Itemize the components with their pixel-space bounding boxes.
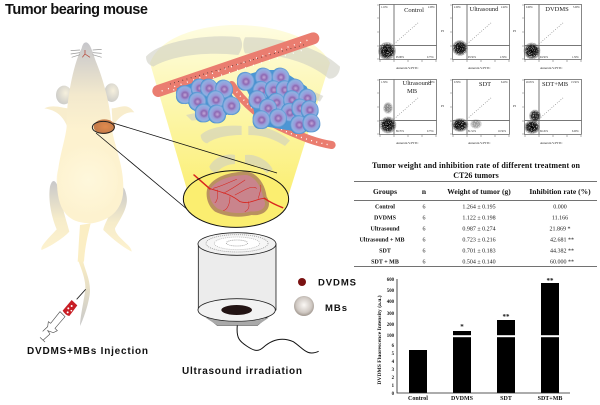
plot: SDT+MB: 60.45%	[540, 130, 549, 133]
enlarged tumor	[183, 171, 289, 227]
plot: Control: 2.08%	[428, 6, 436, 9]
body	[57, 42, 123, 223]
plot: SDT+MB: 13.50%	[571, 81, 580, 84]
table rows: 6	[422, 226, 426, 232]
x axis labels	[408, 396, 562, 402]
table rows: Ultrasound	[370, 226, 400, 232]
table rows: 0.504 ± 0.140	[462, 260, 496, 266]
table rows: 6	[422, 216, 426, 222]
bars	[409, 283, 559, 393]
plot: SDT+MB	[513, 79, 582, 145]
zoom lines	[96, 123, 277, 220]
y axis title: DVDMS Fluorescence Intensity (a.u.)	[376, 295, 383, 385]
tumor cells	[176, 68, 320, 134]
x axis labels: Control	[408, 396, 428, 402]
y axis labels: 5	[392, 352, 395, 357]
ears	[56, 83, 119, 104]
table rows: Control	[375, 204, 395, 210]
plot: DVDMS: DVDMS	[545, 6, 569, 13]
plot: Ultrasound + MB	[377, 79, 437, 145]
plot: Ultrasound: 93.50%	[468, 56, 477, 59]
plot: Ultrasound + MB: Ultrasound	[403, 80, 432, 87]
table rows: 60.000 **	[550, 260, 574, 266]
mouse tail lower	[78, 260, 90, 326]
table rows: 1.122 ± 0.198	[462, 216, 496, 222]
table header: Groups	[373, 187, 397, 196]
plot: Ultrasound: 2.00%	[454, 6, 462, 9]
plot: Ultrasound + MB: 0.75%	[427, 130, 435, 133]
legend: MBs	[294, 296, 347, 316]
table rows: 6	[422, 238, 426, 244]
x axis labels: DVDMS	[451, 396, 474, 402]
plot: Control: Annexin V-FITC	[396, 66, 419, 70]
plot: SDT: PI	[441, 104, 444, 108]
table header: n	[422, 187, 427, 196]
y axis labels: 4	[392, 360, 395, 365]
legend: DVDMS: DVDMS	[318, 278, 356, 288]
table	[354, 182, 597, 266]
legend: MBs: MBs	[325, 303, 347, 314]
table header	[373, 187, 591, 196]
plot: SDT+MB: 20.05%	[526, 81, 535, 84]
mouse	[41, 42, 134, 262]
whiskers and nose	[71, 49, 102, 57]
table rows: 21.869 *	[550, 226, 570, 232]
significance marks: **	[502, 313, 510, 321]
plot: SDT+MB: 6.00%	[572, 130, 580, 133]
y axis labels: 600	[387, 278, 395, 283]
flow cytometry plots	[377, 4, 582, 145]
y axis labels: 2	[392, 376, 395, 381]
table header: Weight of tumor (g)	[447, 187, 511, 196]
plot: DVDMS: 3.00%	[573, 6, 581, 9]
y axis labels: 1	[392, 384, 395, 389]
plot: DVDMS: 0.90%	[526, 6, 534, 9]
syringe	[40, 289, 86, 342]
table rows: 44.382 **	[550, 248, 574, 254]
plot: DVDMS	[513, 4, 582, 70]
plot: Control	[377, 4, 437, 70]
table title: Tumor weight and inhibition rate of different treatment on	[372, 161, 581, 170]
plot: SDT: 81.52%	[468, 130, 477, 133]
legend: DVDMS	[298, 278, 356, 288]
significance marks: *	[460, 323, 464, 331]
plot: Control: Control	[404, 7, 424, 14]
x axis labels: SDT	[500, 396, 512, 402]
plot: Ultrasound + MB: 89.70%	[396, 130, 405, 133]
table rows: 0.723 ± 0.216	[462, 238, 496, 244]
plot: Ultrasound: 2.30%	[500, 56, 508, 59]
plot: Ultrasound: PI	[441, 29, 444, 33]
plot: SDT	[441, 79, 510, 145]
blood vessels	[158, 38, 332, 145]
label: ultrasound irradiation: Ultrasound irradiation	[182, 366, 302, 377]
illustration: ultrasound beam	[146, 25, 340, 200]
plot: Control: 95.88%	[396, 56, 405, 59]
significance marks	[460, 277, 554, 331]
y axis labels: 0	[392, 392, 395, 397]
table rows: 42.681 **	[550, 238, 574, 244]
table rows: 11.166	[552, 216, 568, 222]
plot: SDT: 10.50%	[498, 130, 507, 133]
significance marks: **	[546, 277, 554, 285]
table rows: 1.264 ± 0.195	[462, 204, 496, 210]
plot: SDT+MB: SDT+MB	[542, 81, 569, 88]
y axis labels: 200	[387, 323, 395, 328]
plot: SDT: 0.30%	[454, 81, 462, 84]
plot: DVDMS: 94.50%	[540, 56, 549, 59]
plot: Ultrasound: 2.40%	[501, 6, 509, 9]
y axis labels: 500	[387, 289, 395, 294]
title: Tumor bearing mouse	[5, 2, 148, 18]
table rows: Ultrasound + MB	[359, 238, 405, 244]
plot: Control: 1.10%	[381, 6, 389, 9]
table rows: 0.987 ± 0.274	[462, 226, 496, 232]
ultrasound transducer	[198, 233, 319, 353]
bar chart	[376, 277, 570, 402]
x axis labels: SDT+MB	[538, 396, 562, 402]
plot: Ultrasound	[441, 4, 510, 70]
plot: Ultrasound + MB: Annexin V-FITC	[396, 141, 419, 145]
plot: Ultrasound + MB: MB	[407, 88, 418, 95]
y axis labels: 100	[387, 334, 395, 339]
cable	[237, 325, 319, 353]
table rows: SDT	[379, 248, 391, 254]
label: injection: DVDMS+MBs Injection	[27, 346, 148, 357]
table title: CT26 tumors	[453, 171, 499, 180]
plot: DVDMS: Annexin V-FITC	[540, 66, 563, 70]
table rows: 6	[422, 204, 426, 210]
plot: SDT+MB: Annexin V-FITC	[540, 141, 563, 145]
plot: SDT: Annexin V-FITC	[468, 141, 491, 145]
y axis labels: 3	[392, 368, 395, 373]
y axis labels: 6	[392, 344, 395, 349]
plot: DVDMS: PI	[513, 29, 516, 33]
table rows: SDT + MB	[371, 260, 399, 266]
plot: SDT+MB: PI	[513, 104, 516, 108]
y axis labels: 300	[387, 312, 395, 317]
table rows	[359, 204, 574, 266]
table rows: 6	[422, 248, 426, 254]
sound waves	[146, 36, 340, 173]
y axis labels	[387, 278, 395, 397]
limbs	[41, 106, 134, 262]
plot: Ultrasound: Ultrasound	[470, 6, 499, 13]
plot: SDT: SDT	[479, 81, 491, 88]
table header: Inhibition rate (%)	[529, 187, 591, 196]
plot: Ultrasound + MB: 5.00%	[428, 81, 436, 84]
plot: DVDMS: 1.50%	[572, 56, 580, 59]
table rows: 0.701 ± 0.183	[462, 248, 496, 254]
plot: Ultrasound + MB: 1.50%	[381, 81, 389, 84]
table title	[372, 161, 581, 180]
tumor on mouse	[92, 119, 115, 134]
plot: SDT: 6.20%	[501, 81, 509, 84]
plot: Ultrasound: Annexin V-FITC	[468, 66, 491, 70]
y axis labels: 400	[387, 300, 395, 305]
table rows: 6	[422, 260, 426, 266]
table rows: DVDMS	[374, 216, 397, 222]
axis break	[450, 335, 562, 337]
plot: Control: 0.75%	[427, 56, 435, 59]
table rows: 0.000	[553, 204, 567, 210]
